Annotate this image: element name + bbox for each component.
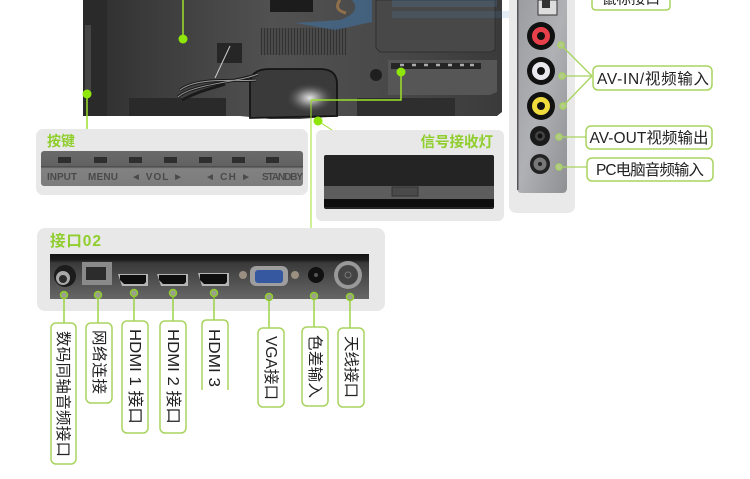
label: VGA: VGA接口 [262, 336, 280, 400]
label: HDMI 1 [122, 321, 148, 433]
heading: buttons: 按键 [47, 133, 75, 149]
icon: white RCA jack [527, 57, 555, 85]
panel: side connector background [509, 0, 575, 213]
label: HDMI 3: HDMI 3 [205, 329, 222, 387]
icon: VGA port [239, 266, 299, 286]
label: coaxial audio: 数码同轴音频接口 [54, 331, 72, 457]
icon: component jack [308, 267, 324, 283]
interface photo strip [50, 254, 369, 299]
icon: HDMI 3 [198, 273, 229, 286]
buttons photo strip [41, 151, 303, 186]
label: PC audio: PC电脑音频输入 [596, 161, 704, 179]
label: antenna [338, 328, 364, 407]
buttons photo strip: MENU [88, 172, 118, 183]
label: network: 网络连接 [90, 330, 108, 394]
icon: yellow RCA jack [527, 92, 555, 120]
panel: buttons [36, 129, 308, 195]
label: HDMI 3 [202, 320, 228, 390]
callout lines: connectors [559, 45, 592, 167]
panel: signal receiver light [316, 130, 504, 221]
icon: HDMI 2 [157, 274, 188, 286]
callout dots: connectors [556, 42, 566, 170]
label: HDMI 2 [160, 321, 186, 433]
label: network [86, 323, 112, 403]
callout dots: TV back [82, 34, 406, 126]
port callout lines [64, 296, 350, 328]
icon: USB port [538, 0, 557, 15]
panel: interface 02 [37, 228, 385, 311]
buttons photo strip: INPUT [47, 172, 77, 183]
heading: interface 02: 接口02 [50, 232, 102, 250]
label: PC audio [587, 158, 713, 181]
label: component input [302, 327, 328, 406]
label: coaxial audio [51, 323, 76, 464]
port callout dots [60, 290, 354, 300]
icon: AV-OUT jack [530, 126, 550, 146]
label: component input: 色差输入 [306, 335, 324, 398]
label: HDMI 1: HDMI 1 接口 [126, 329, 144, 424]
receiver photo [324, 155, 494, 209]
label: AV-IN [593, 66, 712, 90]
icon: HDMI 1 [118, 274, 148, 286]
buttons photo strip: ◄ CH ► [205, 172, 251, 183]
icon: PC audio jack [530, 154, 550, 174]
label: VGA [258, 328, 284, 407]
icon: antenna port [334, 261, 362, 289]
label: mouse port [592, 0, 670, 10]
buttons photo strip: ◄ VOL ► [131, 172, 183, 183]
buttons photo strip: STANDBY [262, 172, 303, 183]
label: HDMI 2: HDMI 2 接口 [164, 329, 182, 424]
label: AV-OUT [586, 126, 712, 149]
heading: signal light: 信号接收灯 [420, 133, 493, 151]
label: AV-IN: AV-IN/视频输入 [597, 70, 709, 88]
panel: silver connector plate [517, 0, 567, 193]
callout lines: TV back [87, 0, 401, 228]
panel: TV back [83, 0, 502, 119]
icon: ethernet port [82, 262, 112, 285]
watermark logo [295, 0, 517, 30]
icon: red RCA jack [527, 22, 555, 50]
label: antenna: 天线接口 [342, 336, 360, 398]
label: AV-OUT: AV-OUT视频输出 [590, 129, 708, 147]
icon: coaxial port [54, 265, 76, 287]
